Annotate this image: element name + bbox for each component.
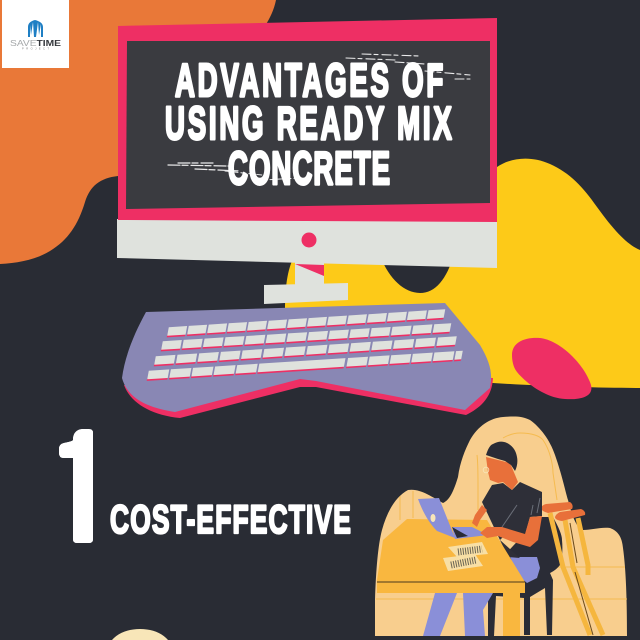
keyboard keys	[148, 314, 462, 375]
yellow blob	[285, 159, 640, 388]
logo	[2, 0, 69, 68]
shirt fold lines	[502, 498, 540, 527]
arms	[472, 505, 542, 547]
paper text lines	[451, 549, 482, 565]
papers	[443, 542, 488, 571]
face and neck	[486, 457, 518, 490]
laptop keyboard	[452, 527, 468, 538]
orange blob	[0, 0, 276, 264]
next section circle	[112, 629, 168, 640]
desktop monitor	[117, 18, 497, 304]
logo wordmark: SAVE TIME	[10, 38, 61, 48]
scribble marks on title	[168, 54, 470, 180]
glasses	[483, 467, 489, 473]
title	[165, 56, 452, 195]
chair	[488, 517, 562, 636]
number 1: 1	[40, 394, 132, 578]
table	[377, 519, 525, 593]
keyboard	[122, 303, 493, 418]
left leg	[423, 593, 457, 636]
lavender thigh	[510, 557, 540, 583]
right leg	[463, 593, 493, 636]
logo tagline: PROJECT	[22, 46, 49, 50]
monitor frame	[118, 18, 497, 222]
title line 2: USING READY MIX	[165, 99, 452, 150]
logo background	[2, 0, 69, 68]
heading: cost-effective: COST-EFFECTIVE	[110, 498, 351, 542]
torso	[482, 482, 542, 558]
monitor screen	[126, 41, 490, 209]
backdrop arch lines	[376, 433, 627, 599]
laptop	[418, 498, 488, 539]
logo icon	[28, 20, 43, 37]
laptop logo	[430, 514, 436, 522]
hair	[486, 442, 517, 471]
monitor stand neck	[295, 262, 324, 287]
title line 1: ADVANTAGES OF	[175, 56, 443, 107]
table leg	[503, 593, 520, 636]
monitor stand pink accent	[295, 264, 324, 276]
illustration: person with laptop	[375, 416, 627, 636]
pink ellipse	[512, 338, 591, 399]
title line 3: CONCRETE	[228, 144, 390, 195]
crutches	[550, 513, 603, 635]
keyboard pink edge	[124, 376, 493, 418]
dark notch in yellow blob	[378, 250, 455, 293]
table edge line	[377, 581, 525, 583]
monitor chin	[117, 219, 497, 268]
keyboard key shadows	[147, 318, 461, 380]
beige backdrop	[375, 416, 627, 636]
crutch handles	[541, 502, 585, 521]
keyboard body	[122, 303, 491, 412]
monitor power button	[302, 232, 316, 248]
monitor stand base	[264, 283, 348, 304]
